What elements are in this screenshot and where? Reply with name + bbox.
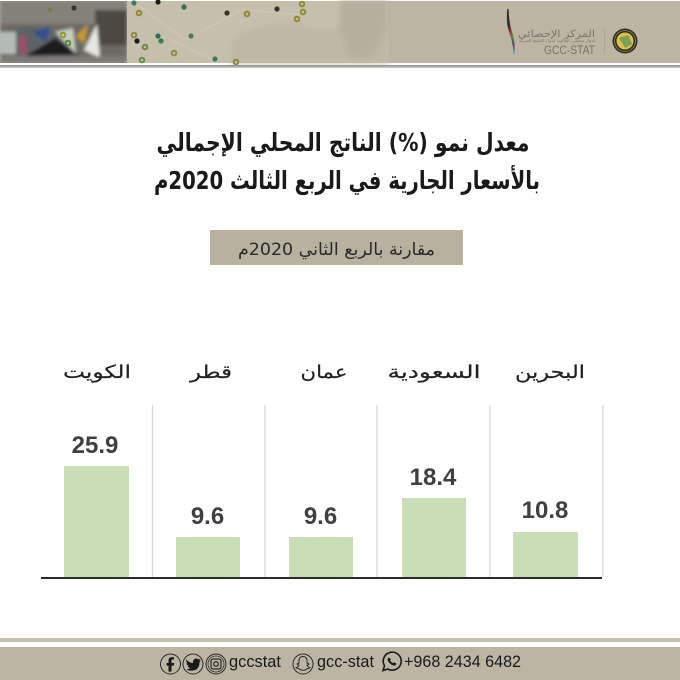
header banner <box>0 0 680 64</box>
handle: gccstat: gccstat <box>229 652 281 671</box>
icon: snapchat <box>293 654 313 674</box>
subtitle box <box>210 230 463 265</box>
title: معدل نمو (%) الناتج المحلي الإجمالي <box>156 128 530 158</box>
axis line <box>41 577 602 579</box>
category labels: قطر <box>189 362 232 383</box>
GCC-Stat logo <box>507 9 638 57</box>
icon: instagram <box>206 654 226 674</box>
header rule <box>0 65 680 68</box>
map dots <box>47 0 305 64</box>
title <box>154 128 540 196</box>
value labels: 9.6 <box>191 503 224 530</box>
subtitle box: مقارنة بالربع الثاني 2020م <box>238 240 435 260</box>
category labels: عمان <box>300 362 348 383</box>
value labels: 10.8 <box>522 497 568 524</box>
bar chart <box>41 362 603 579</box>
footer bar <box>0 647 680 680</box>
handle: gcc-stat: gcc-stat <box>317 652 374 671</box>
value labels: 25.9 <box>72 432 118 459</box>
category labels: السعودية <box>388 362 480 383</box>
header photo <box>0 0 127 64</box>
title: بالأسعار الجارية في الربع الثالث 2020م <box>154 165 540 196</box>
value labels <box>72 432 568 530</box>
GCC-Stat logo: GCC-STAT <box>544 45 595 57</box>
GCC-Stat logo: لدول مجلس التعاون لدول الخليج العربية <box>519 38 595 43</box>
icon: twitter <box>183 654 203 674</box>
footer strip <box>0 638 680 642</box>
bars <box>64 466 578 578</box>
category labels: الكويت <box>63 362 131 383</box>
value labels: 9.6 <box>304 503 337 530</box>
category labels <box>63 362 585 383</box>
map texture <box>127 1 388 63</box>
icon: whatsapp <box>383 652 401 670</box>
category labels: البحرين <box>515 362 585 383</box>
GCC-Stat logo: المركز الإحصائي <box>518 29 595 40</box>
icon: facebook <box>160 654 180 674</box>
phone number: +968 2434 6482 <box>404 652 521 671</box>
value labels: 18.4 <box>410 464 457 491</box>
